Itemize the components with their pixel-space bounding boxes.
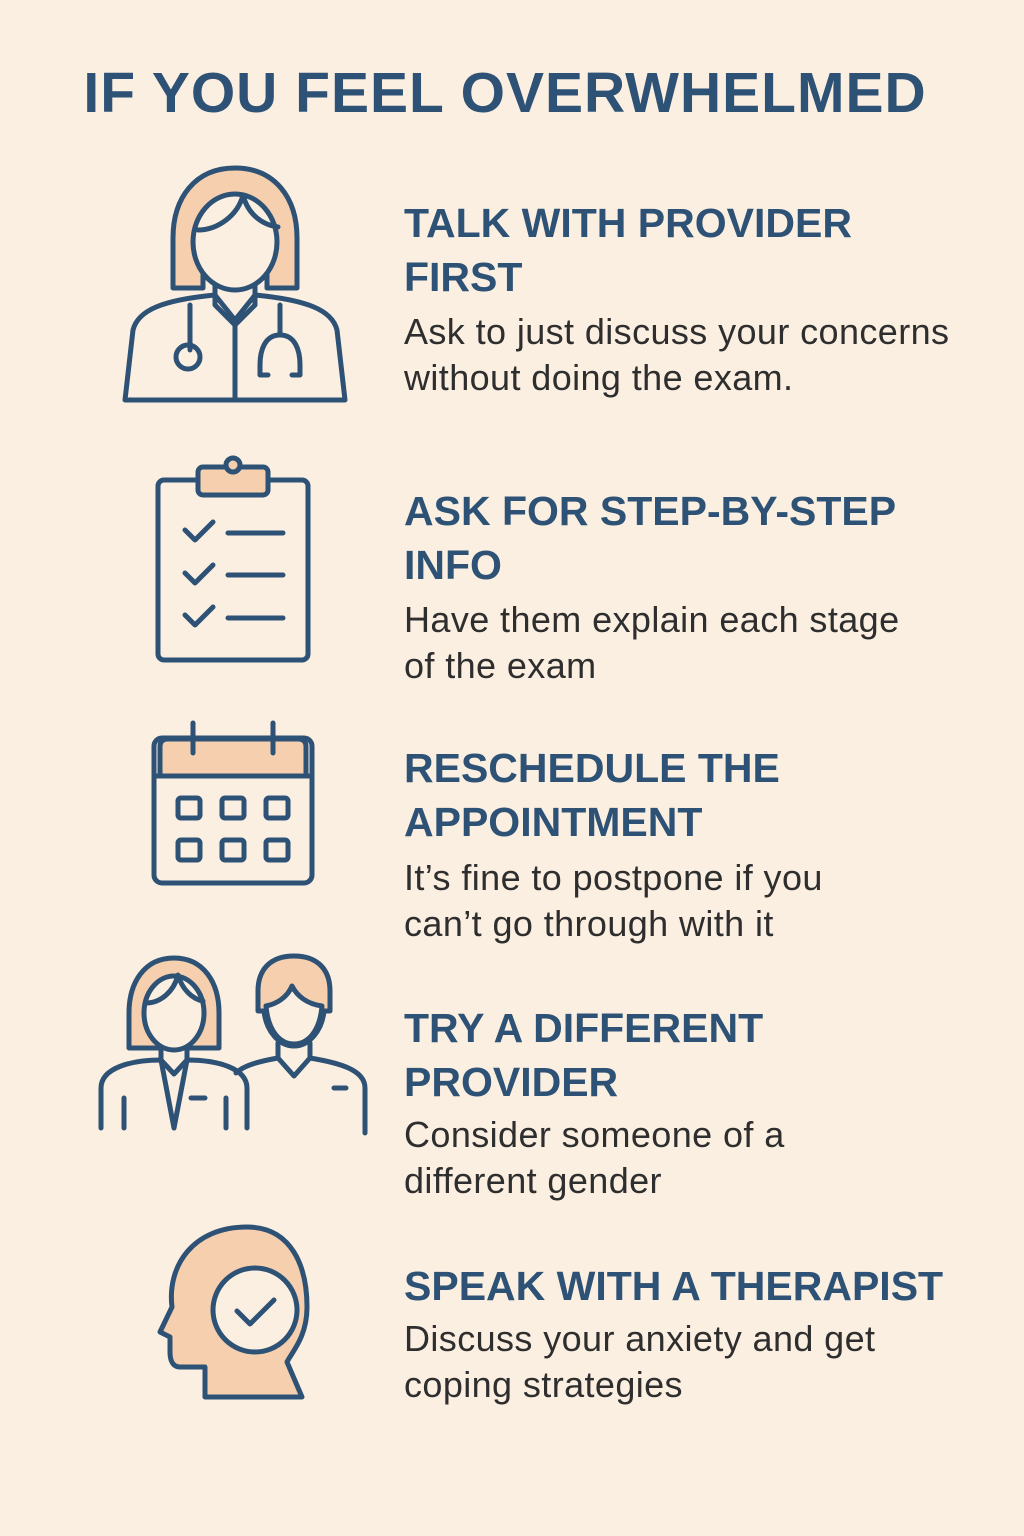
body 2: Have them explain each stage — [404, 599, 900, 640]
body 4: different gender — [404, 1160, 662, 1201]
body 3: can’t go through with it — [404, 903, 774, 944]
heading 3: RESCHEDULE THE — [404, 745, 780, 791]
heading 3 — [404, 745, 780, 845]
icon: clipboard — [156, 456, 310, 662]
heading 1 — [404, 200, 852, 300]
body 1 — [404, 311, 949, 398]
heading 2: ASK FOR STEP-BY-STEP — [404, 488, 896, 534]
title: IF YOU FEEL OVERWHELMED — [83, 61, 927, 125]
icon: two providers — [98, 954, 368, 1136]
heading 4: TRY A DIFFERENT — [404, 1005, 763, 1051]
body 3 — [404, 857, 823, 944]
heading 1: TALK WITH PROVIDER — [404, 200, 852, 246]
heading 3: APPOINTMENT — [404, 799, 702, 845]
body 1: without doing the exam. — [404, 357, 793, 398]
body 2: of the exam — [404, 645, 597, 686]
icon: doctor — [122, 166, 348, 402]
heading 2 — [404, 488, 896, 588]
icon: head with check — [158, 1224, 310, 1400]
body 5: Discuss your anxiety and get — [404, 1318, 875, 1359]
body 2 — [404, 599, 900, 686]
heading 1: FIRST — [404, 254, 522, 300]
body 5 — [404, 1318, 875, 1405]
body 5: coping strategies — [404, 1364, 683, 1405]
heading 4: PROVIDER — [404, 1059, 618, 1105]
icon: calendar — [152, 720, 314, 886]
heading 5: SPEAK WITH A THERAPIST — [404, 1263, 943, 1309]
heading 4 — [404, 1005, 763, 1105]
heading 2: INFO — [404, 542, 502, 588]
body 4: Consider someone of a — [404, 1114, 785, 1155]
body 3: It’s fine to postpone if you — [404, 857, 823, 898]
body 1: Ask to just discuss your concerns — [404, 311, 949, 352]
body 4 — [404, 1114, 785, 1201]
